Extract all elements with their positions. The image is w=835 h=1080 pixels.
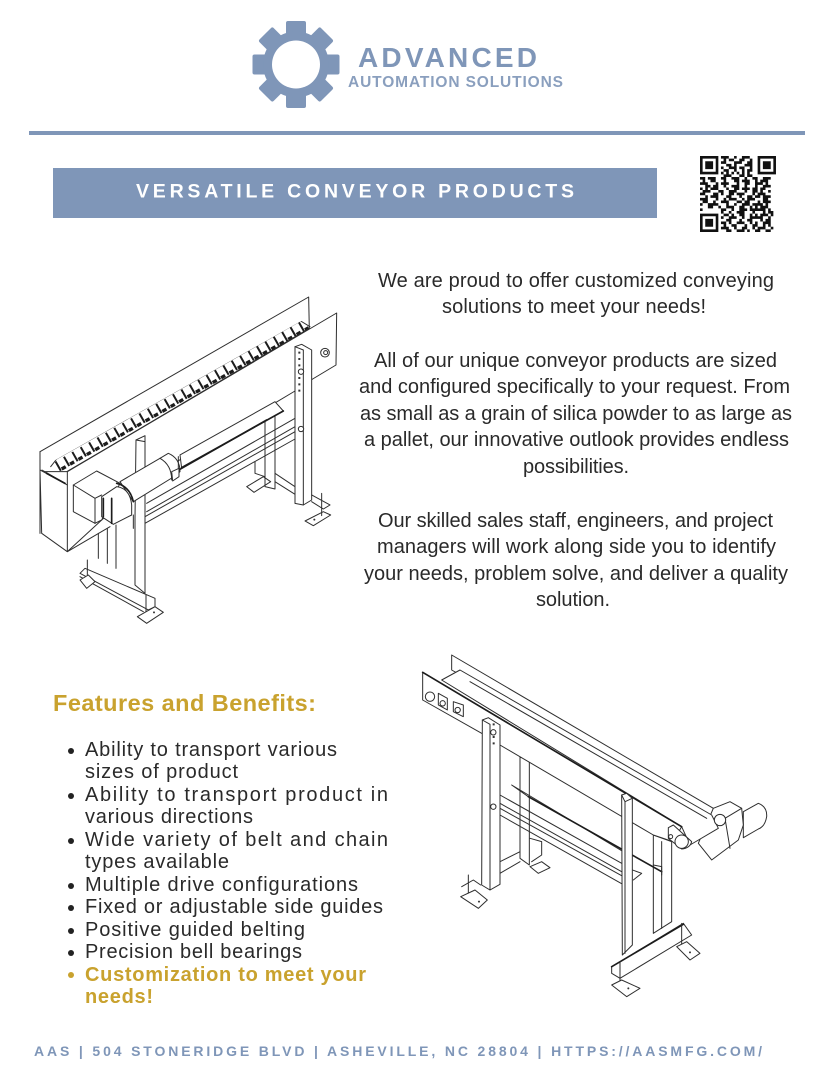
logo wordmark: ADVANCED [358,42,537,73]
right foot [305,512,331,526]
intro text: your needs, problem solve, and deliver a quality [364,563,788,585]
shelf and cross bars [512,785,642,880]
intro text: Our skilled sales staff, engineers, and project [378,510,773,532]
intro text: managers will work along side you to identify [377,536,776,558]
adjustment holes and bolts [491,723,496,809]
front plate [40,313,337,552]
rear leg [265,402,275,489]
feature list [68,739,388,1008]
adjustment holes and bolts [298,352,304,432]
feature list: various directions [85,806,253,828]
illustration: chain conveyor [40,297,337,623]
shaft knob [321,348,329,357]
heading: Features and Benefits: Features and Benefits: [53,690,316,716]
title: VERSATILE CONVEYOR PRODUCTS [136,180,574,202]
QR finder: top left [700,156,718,174]
intro text: solutions to meet your needs! [442,296,706,318]
feature list: Wide variety of belt and chain [85,829,388,851]
gear cover [102,487,132,524]
intro text [359,270,792,611]
intro text: as small as a grain of silica powder to as large as [360,403,792,425]
intro text: possibilities. [523,456,629,478]
take-up hardware [425,692,463,717]
left front leg [135,436,145,593]
front plate [423,672,682,842]
feature list: Multiple drive configurations [85,874,358,896]
rear legs [520,757,529,865]
header divider [29,131,805,135]
front right leg [295,344,312,505]
bottom channel [612,923,692,978]
logo: Advanced Automation Solutions [252,21,563,108]
left feet [80,575,95,588]
highlighted feature: needs! [85,986,153,1008]
logo tagline: AUTOMATION SOLUTIONS [348,74,563,91]
intro text: All of our unique conveyor products are sized [374,350,777,372]
belt surface [442,670,718,845]
motor cylinder [120,453,180,502]
shelf and cross bars [180,402,283,468]
right feet [677,942,700,960]
end plate and roller [668,814,726,849]
chain links [51,320,310,471]
footer contact line: AAS | 504 STONERIDGE BLVD | ASHEVILLE, NC 28804 | HTTPS://AASMFG.COM/ [34,1043,762,1059]
conveyor back plate [40,297,309,472]
gearbox [698,802,743,860]
bottom channel [80,568,155,610]
illustration: belt conveyor [423,655,767,997]
highlighted feature [68,964,366,1008]
rear foot and brace [247,462,295,494]
conveyor back plate [452,655,713,816]
intro text: a pallet, our innovative outlook provides endless [364,429,789,451]
gearbox [73,471,120,523]
motor cylinder [743,803,767,838]
feature list: Precision bell bearings [85,941,302,963]
feature list: Positive guided belting [85,919,305,941]
rear foot and brace [500,838,550,873]
feature list: Fixed or adjustable side guides [85,896,383,918]
highlighted feature: Customization to meet your [85,964,366,986]
QR code [700,156,776,232]
front right leg [622,793,632,955]
feature list: Ability to transport various [85,739,337,761]
left leg [482,718,500,890]
intro text: solution. [536,589,610,611]
QR finder: bottom left [700,214,718,232]
inner legs [98,525,116,568]
list bullets [68,748,74,956]
feature list: types available [85,851,229,873]
left foot [462,875,481,897]
feature list: sizes of product [85,761,238,783]
intro text: and configured specifically to your request. From [359,376,790,398]
icon: gear [252,21,340,108]
title banner [53,168,657,218]
intro text: We are proud to offer customized conveying [378,270,774,292]
feature list: Ability to transport product in [85,784,388,806]
QR finder: top right [758,156,776,174]
